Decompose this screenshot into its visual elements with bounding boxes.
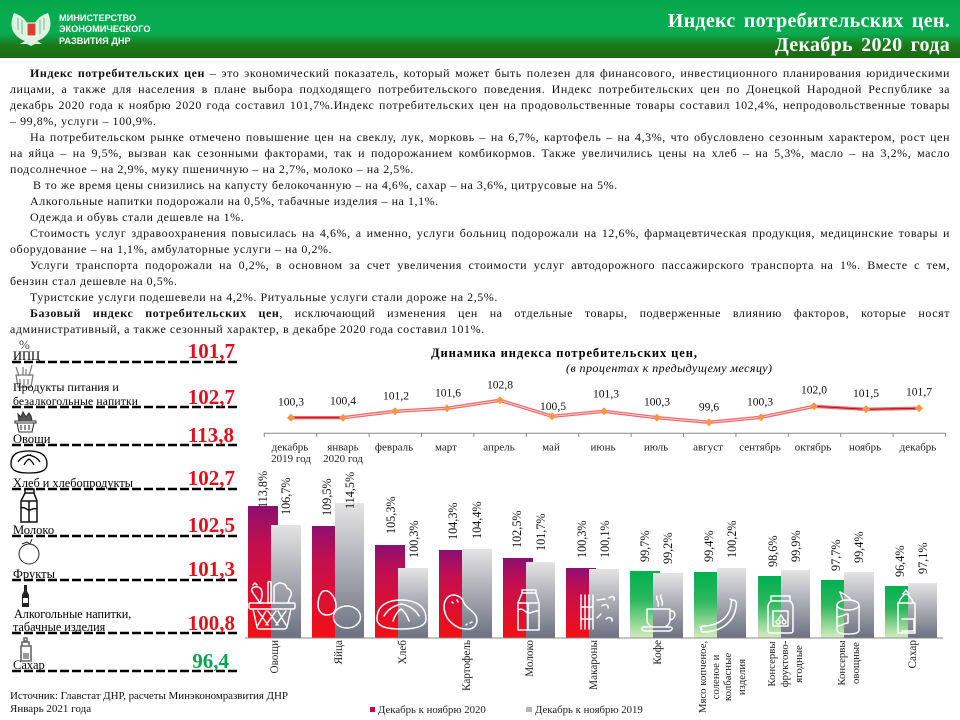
category labels: Консервы	[766, 641, 778, 687]
icon: vegetable basket	[249, 582, 295, 629]
value labels: 100,3%	[575, 520, 589, 558]
item: Алкогольные напитки	[13, 585, 235, 635]
chart subtitle: (в процентах к предыдущему месяцу)	[566, 361, 772, 375]
text block: description: Одежда и обувь стали дешевле на 1%.	[30, 210, 244, 224]
value labels: 98,6%	[766, 536, 780, 567]
line chart: monthly CPI: сентябрь	[739, 442, 781, 454]
category labels: Картофель	[461, 640, 473, 691]
line chart: monthly CPI: январь	[327, 442, 359, 454]
icon: eggs	[318, 591, 360, 628]
category labels: Кофе	[652, 640, 664, 665]
icon: bread	[377, 600, 426, 629]
value labels: 100,3%	[407, 520, 421, 558]
icon: coffee cup	[642, 595, 675, 631]
line chart: monthly CPI: 101,6	[435, 386, 461, 400]
line chart: monthly CPI: август	[693, 442, 723, 454]
item: ИПЦ: %	[19, 337, 30, 352]
text block: description: на яйца – на 9,5%, вызван как сезонными факторами, так и подорожанием комбикормов. Также увеличились цены на хлеб – на 5,3%, масло – на 3,2%, масло	[10, 146, 950, 160]
item: Продукты питания: 102,7	[188, 385, 235, 409]
category labels: изделия	[736, 659, 748, 695]
legend	[370, 704, 643, 716]
category labels: овощные	[850, 642, 862, 684]
item: Алкогольные напитки: 100,8	[188, 611, 235, 635]
value labels: 99,9%	[789, 531, 803, 562]
title: Декабрь 2020 года	[775, 34, 950, 56]
item: ИПЦ: ИПЦ	[13, 349, 40, 363]
icon: emblem	[11, 13, 50, 46]
category labels: Консервы	[836, 640, 848, 686]
item: Алкогольные напитки: Алкогольные напитки,	[14, 607, 131, 621]
line chart: monthly CPI: апрель	[483, 442, 515, 454]
item: Хлеб: 102,7	[188, 466, 235, 490]
category labels: Овощи	[269, 640, 281, 673]
value labels: 101,7%	[534, 513, 548, 551]
legend: Декабрь к ноябрю 2020	[378, 704, 486, 716]
line chart: monthly CPI: декабрь	[900, 442, 936, 454]
item: Сахар: 96,4	[192, 649, 230, 673]
line chart: monthly CPI: 101,2	[383, 390, 409, 402]
text block: description: Индекс потребительских цен – это экономический показатель, который может быть полезен для финансового, инвестиционного планирования юридическими	[30, 66, 950, 80]
text block: description: Алкогольные напитки подорожали на 0,5%, табачные изделия – на 1,1%.	[30, 194, 439, 208]
line chart: monthly CPI: июль	[644, 442, 668, 454]
value labels: 99,7%	[638, 531, 652, 562]
category labels: колбасные	[722, 653, 734, 701]
item: Молоко: Молоко	[13, 523, 54, 537]
icon: pasta	[581, 595, 614, 629]
item: Молоко: 102,5	[188, 513, 235, 537]
value labels: 97,7%	[829, 540, 843, 571]
ministry name: РАЗВИТИЯ ДНР	[59, 36, 131, 46]
source note: Источник: Главстат ДНР, расчеты Минэкономразвития ДНР	[10, 690, 288, 702]
panel: category index list	[11, 337, 237, 673]
line chart: monthly CPI: 99,6	[699, 400, 719, 414]
text block: description: – 99,8%, услуги – 100,9%.	[10, 114, 156, 128]
line chart: monthly CPI: 102,8	[487, 378, 513, 392]
item: Молоко	[13, 489, 235, 537]
value labels: 106,7%	[279, 477, 293, 515]
line chart: monthly CPI	[264, 378, 946, 465]
value labels: 114,5%	[343, 472, 357, 509]
item: Продукты питания: безалкогольные напитки	[13, 395, 138, 408]
source note	[10, 690, 288, 715]
text block: description: В то же время цены снизились на капусту белокочанную – на 4,6%, сахар – на 3,6%, цитрусовые на 5%.	[33, 178, 618, 192]
line chart: monthly CPI: 100,4	[330, 394, 356, 408]
source note: Январь 2021 года	[10, 703, 91, 715]
chart heading: Динамика индекса потребительских цен,	[431, 346, 697, 360]
item: Продукты питания: Продукты питания и	[13, 380, 119, 394]
item: Сахар	[13, 638, 230, 673]
ministry name: МИНИСТЕРСТВО	[59, 13, 136, 23]
icon: can	[837, 592, 859, 634]
category labels: Хлеб	[397, 640, 409, 664]
category labels: Сахар	[907, 640, 919, 668]
icon: potato	[444, 595, 477, 629]
value labels: 99,4%	[702, 531, 716, 562]
line chart: monthly CPI: 100,5	[540, 400, 566, 413]
category labels: соленое и	[710, 654, 722, 699]
line chart: monthly CPI: 100,3	[747, 396, 773, 408]
item: Фрукты: Фрукты	[13, 567, 56, 581]
text block: description: административный, а также сезонный характер, в декабре 2020 года составил 101%.	[10, 322, 485, 336]
line chart: monthly CPI: май	[542, 442, 560, 454]
value labels: 97,1%	[916, 543, 930, 574]
icon: sugar dispenser	[898, 590, 915, 633]
ministry name: ЭКОНОМИЧЕСКОГО	[59, 24, 151, 34]
text block: description: оборудование – на 1,1%, амбулаторные услуги – на 0,2%.	[10, 242, 332, 256]
item: Хлеб	[11, 451, 235, 490]
category labels: фруктово-	[779, 640, 791, 687]
text block: description: Услуги транспорта подорожали на 0,2%, в основном за счет увеличения стоимости услуг автодорожного пассажирского транспорта на 1%. Вместе с тем,	[30, 258, 950, 272]
line chart: monthly CPI: декабрь	[272, 442, 308, 454]
value labels: 99,4%	[852, 532, 866, 563]
value labels: 102,5%	[510, 510, 524, 548]
category labels	[269, 640, 919, 713]
value labels: 105,3%	[384, 496, 398, 534]
line chart: monthly CPI: 100,3	[644, 396, 670, 408]
value labels: 96,4%	[893, 546, 907, 577]
line chart: monthly CPI: июнь	[590, 442, 616, 454]
bar icons	[249, 582, 915, 634]
value labels: 104,3%	[446, 502, 460, 540]
item: Овощи	[13, 412, 234, 447]
title: Индекс потребительских цен.	[668, 10, 950, 32]
line chart: monthly CPI: 2020 год	[323, 453, 363, 465]
category labels: Макароны	[588, 640, 600, 690]
category labels: ягодные	[793, 645, 805, 683]
line chart: monthly CPI: февраль	[375, 442, 413, 454]
bar chart: price change by product	[245, 471, 943, 713]
value labels: 113,8%	[256, 471, 270, 508]
category labels: Мясо копченое,	[697, 641, 709, 713]
line chart: monthly CPI: 102,0	[801, 384, 827, 396]
item: Фрукты	[13, 539, 235, 581]
line chart: monthly CPI: 2019 год	[271, 453, 311, 465]
text block: description: подсолнечное – на 2,9%, муку пшеничную – на 2,7%, молоко – на 2,5%.	[10, 162, 414, 176]
item: Алкогольные напитки: табачные изделия	[13, 620, 106, 634]
text block: description: лицами, а также для населения в плане выбора подходящего потребительского поведения. Индекс потребительских цен по Донецкой Народной Республике за	[10, 82, 950, 96]
text block: description: На потребительском рынке отмечено повышение цен на свеклу, лук, морковь – на 6,7%, картофель – на 4,3%, что обусловлено сезонным характером, рост цен	[30, 130, 950, 144]
value labels: 109,5%	[320, 478, 334, 516]
item: Овощи: Овощи	[13, 432, 51, 446]
line chart: monthly CPI: 101,7	[906, 386, 932, 398]
line chart: monthly CPI: 100,3	[278, 396, 304, 408]
value labels	[256, 471, 930, 577]
text block: description: декабрь 2020 года к ноябрю 2020 года составил 101,7%.Индекс потребительских цен на продовольственные товары составил 102,4%, непродовольственные товары	[10, 98, 950, 112]
item: ИПЦ: 101,7	[188, 339, 235, 363]
item: Сахар: Сахар	[13, 658, 45, 672]
icon: milk carton	[518, 590, 539, 630]
text block: description	[10, 66, 950, 336]
item: Фрукты: 101,3	[188, 557, 235, 581]
category labels: Яйца	[333, 640, 345, 664]
item: Продукты питания	[13, 365, 235, 409]
icon: sausage	[700, 599, 736, 632]
item: Хлеб: Хлеб и хлебопродукты	[13, 476, 133, 490]
legend: Декабрь к ноябрю 2019	[535, 704, 643, 716]
header banner	[0, 0, 960, 58]
title	[668, 10, 950, 56]
item: ИПЦ	[13, 337, 235, 363]
value labels: 100,2%	[725, 520, 739, 558]
value labels: 104,4%	[470, 501, 484, 539]
text block: description: Базовый индекс потребительских цен, исключающий изменения цен на отдельные товары, подверженные влиянию факторов, которые носят	[30, 306, 950, 320]
value labels: 100,1%	[598, 520, 612, 558]
line chart: monthly CPI: октябрь	[795, 442, 831, 454]
icon: jar	[768, 596, 793, 633]
ministry name	[59, 13, 151, 46]
text block: description: Стоимость услуг здравоохранения повысилась на 4,6%, а именно, услуги больниц подорожали на 12,6%, фармацевтическая продукция, медицинские товары и	[30, 226, 950, 240]
text block: description: Туристские услуги подешевели на 4,2%. Ритуальные услуги стали дороже на 2,5%.	[30, 290, 498, 304]
line chart: monthly CPI: 101,3	[593, 388, 619, 400]
item: Овощи: 113,8	[188, 423, 234, 447]
category labels: Молоко	[524, 640, 536, 677]
line chart: monthly CPI: март	[435, 442, 457, 454]
text block: description: бензин стал дешевле на 0,5%.	[10, 274, 177, 288]
value labels: 99,2%	[661, 533, 675, 564]
line chart: monthly CPI: 101,5	[853, 387, 879, 400]
line chart: monthly CPI: ноябрь	[849, 442, 881, 454]
